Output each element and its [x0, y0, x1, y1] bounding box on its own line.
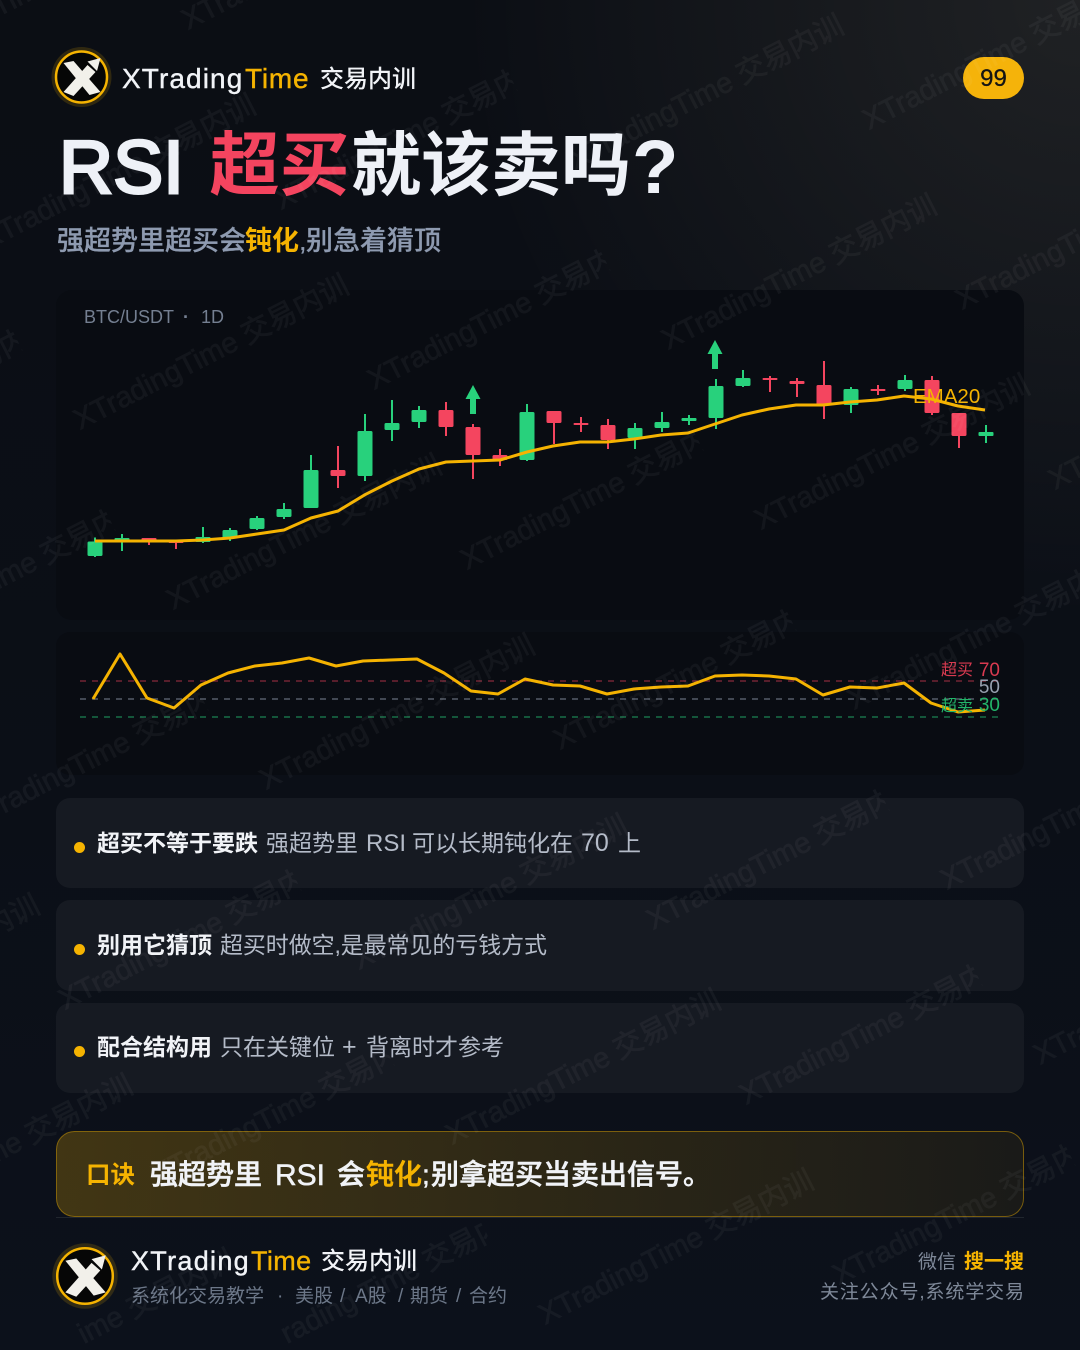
footer call to action: [820, 1250, 1024, 1303]
mnemonic text: 强超势里: [150, 1159, 262, 1190]
badge: issue number: [963, 57, 1024, 99]
watermark pattern: XTradingTime 交易内训: [254, 629, 540, 796]
footer tagline: /: [456, 1286, 462, 1307]
chart symbol label: 1D: [201, 307, 224, 327]
point 1 text: RSI: [366, 830, 406, 857]
title: 就该卖吗: [351, 126, 631, 204]
point 1 text: 强超势里: [266, 830, 358, 856]
point 1 text: 可以长期钝化在: [412, 830, 573, 856]
chart symbol label: ·: [183, 307, 189, 327]
point 3 text: 只在关键位: [220, 1034, 335, 1060]
bullet: [74, 944, 85, 955]
subtitle: 别急着猜顶: [306, 226, 441, 256]
footer tagline: 期货: [410, 1285, 448, 1307]
footer brand: [52, 1243, 507, 1309]
mnemonic label: 口诀: [86, 1161, 135, 1189]
watermark pattern: XTradingTime 交易内训: [53, 849, 339, 1016]
point 3 text: [97, 1033, 504, 1061]
card: point 2: [56, 900, 1024, 991]
RSI level labels: [941, 660, 1000, 716]
card: point 1: [56, 798, 1024, 888]
subtitle: ,: [299, 226, 307, 256]
watermark pattern: XTradingTime 交易内训: [68, 269, 354, 436]
subtitle: 强超势里超买会: [57, 226, 246, 256]
watermark pattern: XTradingTime 交易内训: [533, 1164, 819, 1331]
arrow: signal at second overbought: [708, 340, 722, 369]
header brand: [52, 47, 416, 107]
RSI level labels: 超卖: [941, 697, 973, 715]
watermark pattern: XTradingTime 交易内训: [548, 589, 834, 756]
watermark pattern: XTradingTime 交易内训: [656, 189, 942, 356]
watermark pattern: XTradingTime 交易内训: [362, 229, 648, 396]
mnemonic text: 钝化: [366, 1159, 422, 1190]
footer call to action: 微信: [918, 1251, 956, 1273]
subtitle: 钝化: [245, 226, 299, 256]
brand name: XTrading: [122, 63, 243, 94]
bullet: [74, 842, 85, 853]
footer call to action: 关注公众号,系统学交易: [820, 1281, 1024, 1303]
panel: candlestick chart: [56, 290, 1024, 620]
mnemonic text: 会: [337, 1159, 365, 1190]
badge: issue number: 99: [980, 65, 1007, 92]
footer brand name: XTrading: [131, 1246, 250, 1276]
RSI level labels: 50: [979, 677, 1000, 698]
EMA20 line: [95, 396, 985, 541]
point 2 text: 别用它猜顶: [97, 932, 212, 958]
mnemonic text: ;: [422, 1159, 430, 1190]
card: point 3: [56, 1003, 1024, 1093]
footer tagline: 系统化交易教学: [131, 1285, 264, 1307]
brand name: Time: [245, 63, 309, 94]
icon: logo: [52, 47, 112, 107]
footer brand name: 交易内训: [321, 1248, 417, 1275]
watermark pattern: XTradingTime 交易内训: [734, 944, 1020, 1111]
RSI level labels: 30: [979, 695, 1000, 716]
watermark pattern: ime 交易内训: [72, 1243, 239, 1350]
chart symbol label: BTC/USDT: [84, 307, 174, 327]
watermark pattern: XTradingTime 交易内训: [455, 409, 741, 576]
bullet: [74, 1046, 85, 1057]
watermark pattern: XTradingTime 交易内训: [563, 9, 849, 176]
watermark pattern: XTradingTime 交易内训: [347, 809, 633, 976]
point 3 text: 配合结构用: [97, 1034, 212, 1060]
footer tagline: 美股: [295, 1285, 333, 1307]
footer tagline: 合约: [469, 1285, 507, 1307]
point 1 text: 70: [581, 829, 609, 857]
mnemonic text: RSI: [275, 1159, 325, 1192]
footer brand name: [131, 1246, 417, 1276]
watermark pattern: rading Time 交易内训: [275, 1196, 536, 1350]
watermark pattern: XTradingTime 交易内训: [440, 984, 726, 1151]
RSI level labels: 70: [979, 660, 1000, 681]
title: [59, 125, 678, 210]
footer tagline: /: [340, 1286, 346, 1307]
footer tagline: A股: [355, 1286, 387, 1307]
brand name: 交易内训: [320, 66, 416, 93]
candlesticks: [88, 361, 994, 557]
footer tagline: ·: [277, 1286, 283, 1307]
point 1 text: [97, 829, 641, 857]
RSI level lines: [80, 681, 1000, 717]
watermark pattern: XTradingTime 交易内训: [161, 449, 447, 616]
brand name: [122, 63, 416, 94]
RSI line: [93, 654, 985, 712]
subtitle: [57, 226, 441, 256]
title: RSI: [59, 125, 184, 209]
watermark pattern: XTradingTime 交易内训: [749, 369, 1035, 536]
title: ?: [632, 125, 678, 210]
mnemonic text: 别拿超买当卖出信号。: [431, 1158, 711, 1190]
point 1 text: 上: [618, 830, 641, 856]
RSI level labels: 超买: [941, 661, 973, 679]
point 3 text: +: [342, 1033, 357, 1061]
point 2 text: 超买时做空,是最常见的亏钱方式: [220, 932, 547, 958]
mnemonic text: [150, 1158, 711, 1192]
callout: mnemonic: [56, 1132, 1024, 1216]
arrow: signal at first overbought: [466, 385, 480, 414]
point 3 text: 背离时才参考: [366, 1034, 504, 1060]
EMA20 label: EMA20: [913, 385, 980, 408]
icon: footer logo: [52, 1243, 118, 1309]
watermark pattern: XTradingTime 交易内训: [146, 1024, 432, 1191]
watermark pattern: XTradingTime 交易内训: [641, 769, 927, 936]
footer tagline: /: [398, 1286, 404, 1307]
title: 超买: [210, 126, 350, 204]
footer call to action: 搜一搜: [964, 1250, 1024, 1273]
point 1 text: 超买不等于要跌: [97, 830, 258, 856]
watermark pattern: XTradingTime 交易内训: [269, 49, 555, 216]
panel: RSI chart: [56, 632, 1024, 775]
footer brand name: Time: [251, 1246, 312, 1276]
